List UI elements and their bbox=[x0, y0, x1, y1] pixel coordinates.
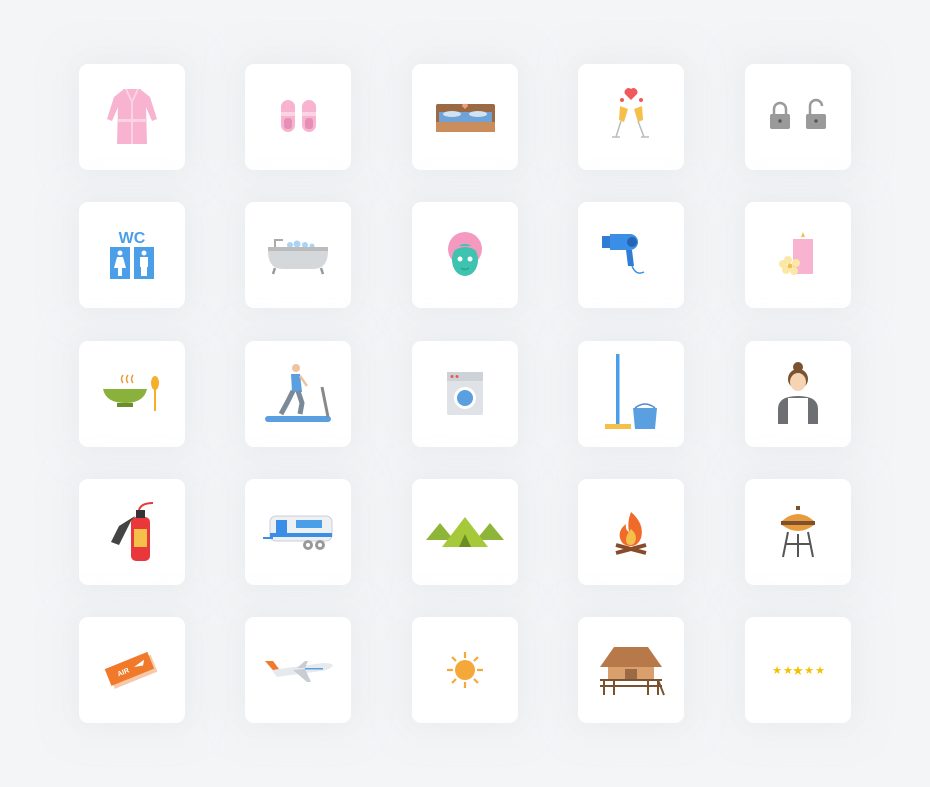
card: WC bbox=[79, 202, 185, 308]
card: grill bbox=[745, 479, 851, 585]
card: WC: WC bbox=[119, 230, 146, 247]
card: fire extinguisher bbox=[79, 479, 185, 585]
card: treadmill bbox=[245, 341, 351, 447]
card: caravan bbox=[245, 479, 351, 585]
card: stars: ★ bbox=[783, 664, 793, 677]
card: campfire bbox=[578, 479, 684, 585]
card: bathtub bbox=[245, 202, 351, 308]
card: stars: ★ bbox=[804, 664, 814, 677]
card: hair dryer bbox=[578, 202, 684, 308]
card: washing machine bbox=[412, 341, 518, 447]
card: stars: ★ bbox=[792, 664, 804, 679]
card: bathrobe bbox=[79, 64, 185, 170]
card: air ticket bbox=[79, 617, 185, 723]
card: mop and bucket bbox=[578, 341, 684, 447]
card: stars: ★ bbox=[772, 664, 782, 677]
card: champagne bbox=[578, 64, 684, 170]
card: stars: ★ bbox=[815, 664, 825, 677]
card: face mask bbox=[412, 202, 518, 308]
card: maid bbox=[745, 341, 851, 447]
card: sun bbox=[412, 617, 518, 723]
card: stars bbox=[745, 617, 851, 723]
card: airplane bbox=[245, 617, 351, 723]
card: hut bbox=[578, 617, 684, 723]
card: slippers bbox=[245, 64, 351, 170]
card: bed bbox=[412, 64, 518, 170]
card: tents bbox=[412, 479, 518, 585]
card: candle bbox=[745, 202, 851, 308]
card: air ticket: AIR bbox=[117, 667, 130, 678]
card: soup bowl bbox=[79, 341, 185, 447]
card: padlocks bbox=[745, 64, 851, 170]
